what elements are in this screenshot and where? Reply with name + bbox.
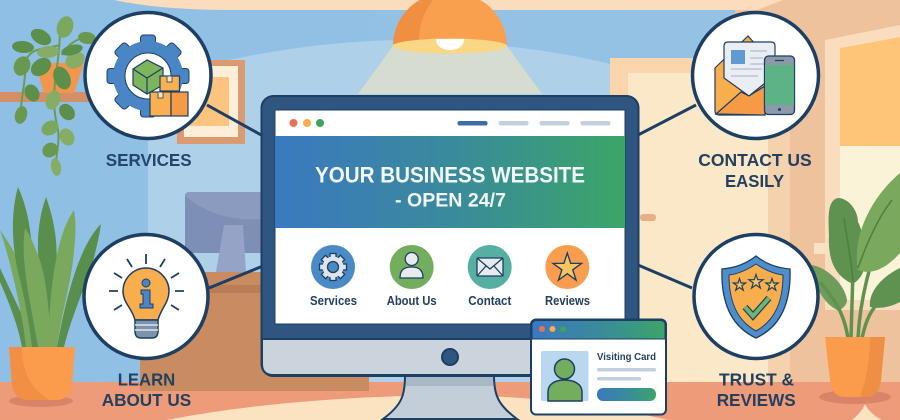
label: contact us easily: EASILY (725, 171, 784, 191)
nav item: services (310, 245, 357, 308)
hero banner: YOUR BUSINESS WEBSITE (315, 162, 585, 188)
monitor body (262, 96, 638, 376)
label: contact us easily: CONTACT US (698, 150, 812, 170)
hero banner (275, 136, 625, 228)
label: trust and reviews: TRUST & (719, 370, 794, 390)
nav item: contact: Contact (468, 293, 512, 308)
label: contact us easily (698, 150, 812, 191)
card lines and button (597, 368, 656, 401)
callout: contact us (692, 12, 818, 138)
callout: learn about us (84, 234, 208, 358)
label: learn about us (102, 370, 191, 410)
nav item: reviews: Reviews (545, 293, 590, 308)
screen (275, 110, 625, 324)
visiting card window (531, 320, 666, 414)
nav item: about us (387, 245, 437, 308)
label: trust and reviews (717, 370, 796, 410)
wall picture frame (177, 60, 245, 144)
hero banner: - OPEN 24/7 (395, 190, 506, 212)
connector lines (207, 105, 696, 288)
nav bars (458, 121, 610, 126)
browser dots (290, 119, 324, 127)
label: learn about us: ABOUT US (102, 390, 191, 410)
background desk with computer (140, 192, 369, 391)
nav item: services: Services (310, 293, 357, 308)
callout: trust and reviews (694, 234, 818, 358)
callout: services (85, 12, 211, 138)
shelf with hanging plant (0, 14, 97, 177)
label: trust and reviews: REVIEWS (717, 390, 796, 410)
card title bar (532, 320, 665, 339)
label: learn about us: LEARN (118, 370, 175, 390)
nav item: reviews (545, 245, 590, 308)
card portrait (541, 351, 588, 401)
broad-leaf potted plant, right (812, 173, 900, 404)
monitor chin with power button (262, 339, 638, 375)
tall potted plant, left (0, 187, 101, 407)
ceiling lamp with light cone (358, 0, 542, 94)
label: services: SERVICES (106, 150, 192, 170)
icon: shield with stars (722, 256, 790, 338)
icon: light bulb (109, 254, 184, 338)
icon: gear with boxes (107, 35, 189, 117)
card text: Visiting Card (597, 351, 656, 363)
nav item: about us: About Us (387, 293, 437, 308)
nav item: contact (468, 245, 512, 308)
icon: envelope and phone (715, 36, 794, 115)
monitor stand (383, 376, 517, 419)
desktop monitor (262, 96, 638, 376)
